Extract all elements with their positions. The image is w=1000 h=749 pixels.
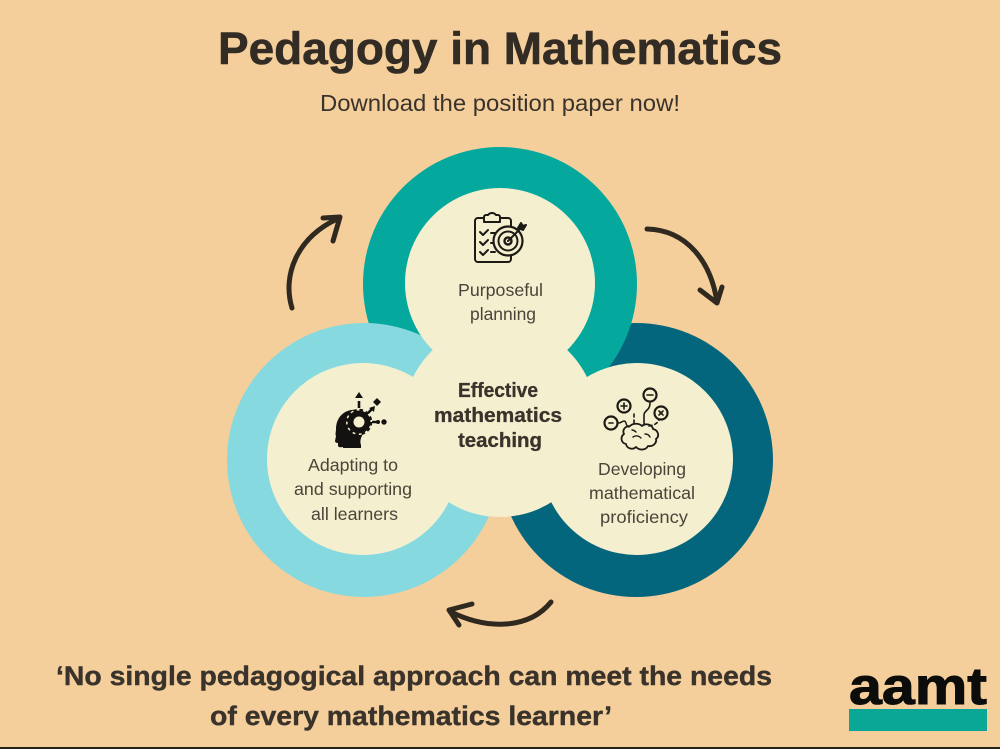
inner circle: centre (403, 323, 597, 517)
ring: dark teal (499, 323, 773, 597)
icon: head with gear (335, 392, 387, 448)
inner circle: adapting (267, 363, 459, 555)
label: centre: Effective (458, 380, 538, 402)
label: centre: mathematics (434, 405, 562, 427)
label: adapting: Adapting to (308, 455, 398, 475)
label: developing: Developing (598, 459, 686, 479)
quote (56, 661, 772, 731)
label: purposeful planning: planning (470, 304, 536, 324)
arrow: top left (289, 217, 340, 308)
logo: aamt: aamt (849, 658, 987, 716)
quote: of every mathematics learner’ (210, 701, 612, 731)
subtitle: Download the position paper now! (320, 90, 680, 116)
title: Pedagogy in Mathematics (218, 23, 782, 74)
quote: ‘No single pedagogical approach can meet the needs (56, 661, 772, 691)
inner circle: purposeful planning (405, 188, 595, 378)
ring: light blue (227, 323, 501, 597)
ring: teal (363, 147, 637, 421)
icon: clipboard with target (475, 213, 526, 262)
icon: brain with operators (604, 388, 668, 450)
arrow: top right (647, 229, 722, 303)
label: developing: mathematical (589, 483, 695, 503)
logo: aamt (849, 658, 987, 731)
label: adapting: all learners (311, 504, 398, 524)
arrow: bottom (449, 602, 551, 625)
label: adapting: and supporting (294, 479, 412, 499)
label: developing: proficiency (600, 507, 688, 527)
inner circle: developing (541, 363, 733, 555)
diagram: three overlapping rings (227, 147, 773, 597)
label: purposeful planning: Purposeful (458, 280, 543, 300)
label: centre: teaching (458, 430, 542, 452)
